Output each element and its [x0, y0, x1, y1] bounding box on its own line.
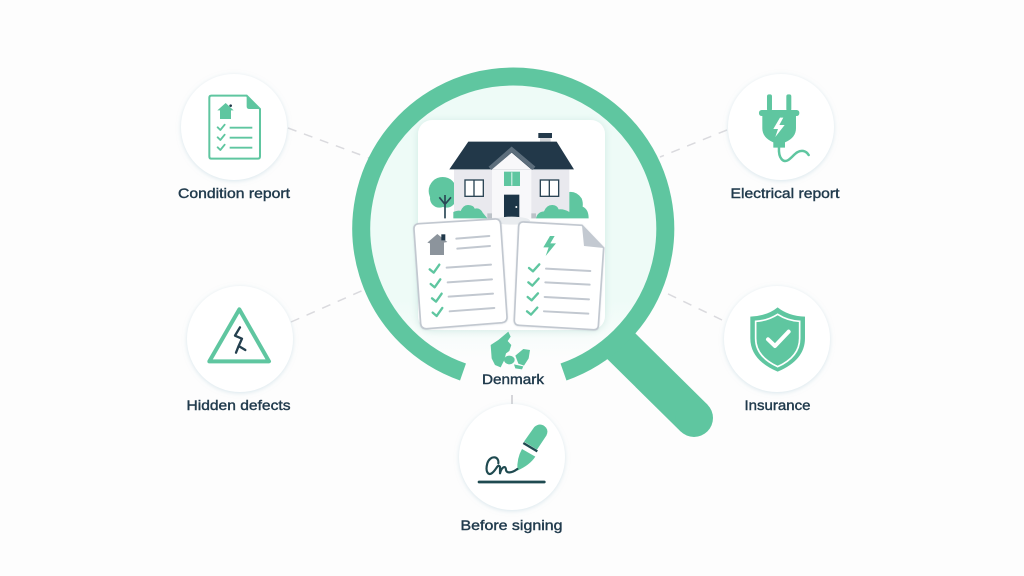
- check marks: [527, 264, 539, 315]
- magnifier: [361, 77, 713, 437]
- circle: [187, 286, 293, 392]
- text lines: [544, 269, 590, 314]
- connector: before signing: [511, 395, 513, 405]
- right bushes: [536, 192, 589, 218]
- label: hidden defects: Hidden defects: [186, 397, 290, 413]
- magnifier handle: [614, 339, 694, 418]
- roof: [449, 142, 574, 169]
- magnifier ring: [361, 77, 665, 372]
- label: condition report: Condition report: [178, 185, 290, 201]
- circle: [724, 286, 830, 392]
- icon: fountain pen signature: [479, 424, 547, 482]
- small house icon: [427, 234, 447, 255]
- connector: insurance: [660, 290, 722, 320]
- left window: [465, 180, 483, 196]
- attic window: [504, 172, 520, 186]
- lens interior: [367, 82, 659, 374]
- node: electrical report: [728, 74, 834, 180]
- walls: [454, 169, 569, 218]
- label: Denmark: Denmark: [482, 371, 545, 387]
- circle: [459, 404, 565, 510]
- panel: house and documents card: [414, 120, 605, 330]
- chimney: [538, 133, 552, 149]
- label: insurance: Insurance: [744, 397, 811, 413]
- circle: [181, 74, 287, 180]
- icon: report document: [209, 96, 260, 159]
- icon: plug: [759, 94, 809, 161]
- document: electrical checklist: [514, 222, 604, 330]
- icon: shield: [750, 307, 805, 372]
- label: before signing: Before signing: [460, 517, 562, 533]
- illustration: house: [429, 133, 589, 225]
- bolt icon: [543, 236, 556, 256]
- connector: hidden defects: [291, 289, 366, 322]
- circle: [728, 74, 834, 180]
- node: hidden defects: [187, 286, 293, 392]
- tree: [429, 177, 457, 218]
- connector: electrical report: [660, 130, 727, 157]
- node: before signing: [459, 404, 565, 510]
- gable: [490, 149, 534, 168]
- right window: [540, 180, 559, 196]
- door: [504, 195, 519, 218]
- folded corner: [582, 225, 604, 248]
- node: insurance: [724, 286, 830, 392]
- label: electrical report: Electrical report: [730, 185, 840, 201]
- node: condition report: [181, 74, 287, 180]
- icon: warning triangle: [209, 309, 269, 361]
- left bushes: [453, 205, 487, 218]
- document: condition checklist: [414, 219, 507, 329]
- check marks: [430, 265, 442, 316]
- text lines: [447, 236, 494, 311]
- connector: condition report: [288, 128, 369, 158]
- icon: Denmark map: [491, 332, 530, 369]
